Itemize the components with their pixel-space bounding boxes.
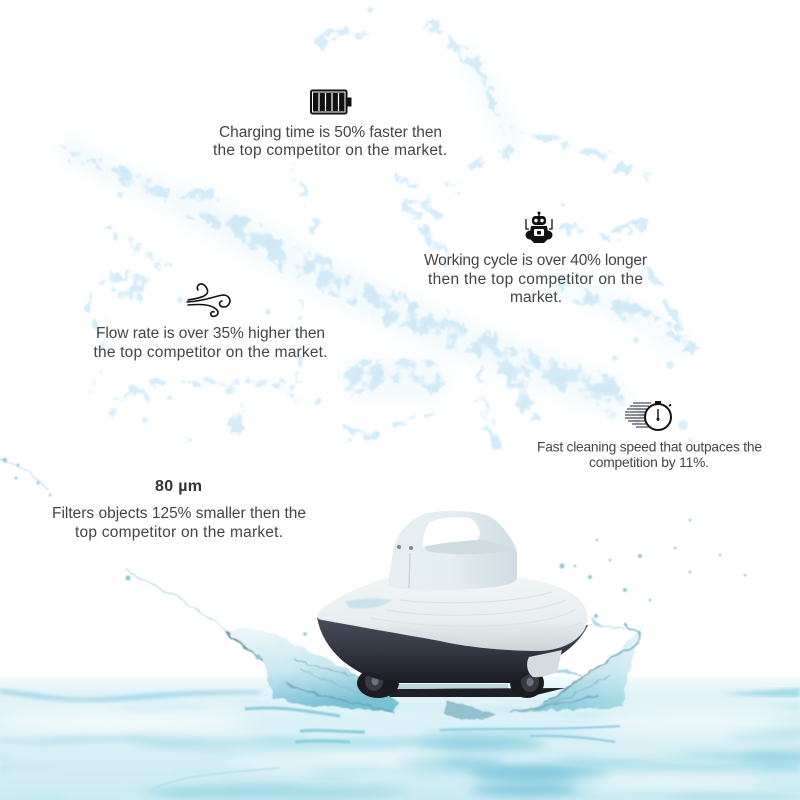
icon: stopwatch — [625, 401, 671, 430]
shell ridges — [370, 592, 582, 638]
text: filters: top competitor on the market. — [75, 524, 283, 541]
left wheel — [357, 668, 399, 698]
text: cleaning speed: Fast cleaning speed that outpaces the — [537, 440, 762, 454]
icon: robot — [526, 212, 552, 243]
text: filters: Filters objects 125% smaller then the — [52, 505, 306, 522]
heading: 80 µm: 80 µm — [155, 478, 202, 495]
icon: wind — [187, 284, 230, 316]
pool cleaning robot — [317, 511, 588, 698]
text: filters — [52, 505, 306, 541]
rear bracket — [527, 650, 562, 677]
water surface — [0, 675, 800, 800]
icon: battery — [310, 90, 352, 114]
text: charging time — [213, 124, 447, 159]
text: working cycle: then the top competitor on the — [428, 271, 643, 288]
text: charging time: Charging time is 50% faster then — [219, 124, 442, 141]
crown edge lines — [0, 458, 640, 712]
text: working cycle: Working cycle is over 40% longer — [424, 252, 647, 269]
water droplets — [3, 458, 746, 660]
splash crown around robot — [0, 458, 746, 742]
reflection ripples — [245, 708, 620, 742]
water splash backdrop — [60, 7, 692, 450]
shadow under robot — [384, 688, 565, 697]
text: charging time: the top competitor on the market. — [213, 142, 447, 159]
left crown sheet — [227, 629, 400, 712]
text: cleaning speed — [537, 440, 762, 470]
right wheel — [510, 668, 544, 698]
white shell — [317, 577, 587, 651]
text: flow rate: Flow rate is over 35% higher then — [96, 325, 325, 342]
text: flow rate — [94, 325, 328, 361]
dark hull — [317, 617, 588, 683]
handle opening — [422, 517, 480, 547]
text: cleaning speed: competition by 11%. — [589, 455, 709, 470]
dome seam — [409, 553, 410, 588]
central foam — [445, 702, 497, 720]
text: working cycle — [424, 252, 647, 306]
blue shell accent — [345, 598, 392, 609]
right crown sheet — [500, 620, 643, 713]
dome — [388, 511, 517, 590]
text: flow rate: the top competitor on the market. — [94, 344, 328, 361]
handle base — [424, 539, 513, 554]
dome buttons — [397, 545, 413, 550]
text: working cycle: market. — [510, 289, 562, 306]
